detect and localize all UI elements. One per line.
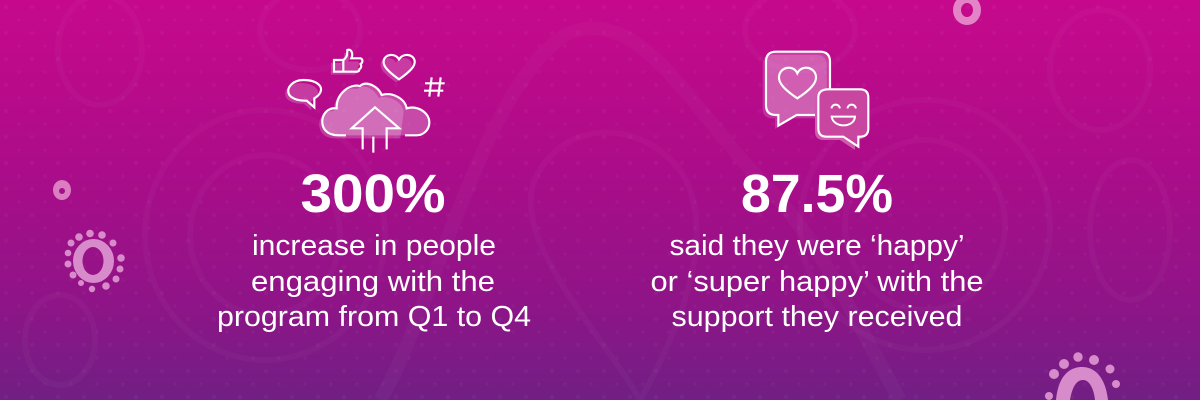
icon: upload arrow: [352, 107, 399, 153]
icon: small smiley bubble: [815, 89, 868, 150]
stat: 87.5%: 87.5%: [741, 164, 893, 224]
icon: chat bubbles: [763, 52, 868, 150]
icon: cloud fill shadow: [319, 87, 404, 138]
icon: thumbs up: [331, 50, 362, 75]
stat: 300%: 300%: [300, 164, 446, 224]
icon: social cloud upload: [285, 50, 445, 153]
decoration: dotted left ring: [64, 230, 125, 292]
decoration: top ring: [953, 0, 981, 25]
text: engagement description: engaging with the: [251, 266, 495, 298]
decoration: small left ring: [53, 180, 71, 200]
text: satisfaction description: [650, 230, 984, 333]
text: satisfaction description: support they received: [672, 301, 962, 333]
text: engagement description: program from Q1 to Q4: [217, 301, 531, 333]
text: engagement description: [217, 230, 531, 333]
decoration: dotted bottom-right ring: [1045, 352, 1120, 400]
icon: speech bubble: [285, 80, 321, 110]
text: engagement description: increase in people: [252, 230, 496, 262]
text: satisfaction description: said they were ‘happy’: [670, 230, 964, 262]
icon: hashtag: [424, 77, 445, 97]
icon: cloud outline: [322, 84, 429, 135]
icon: cloud fill: [322, 84, 429, 135]
text: satisfaction description: or ‘super happy’ with the: [650, 266, 984, 298]
icon: large heart bubble: [763, 52, 830, 129]
icon: heart: [381, 55, 415, 82]
